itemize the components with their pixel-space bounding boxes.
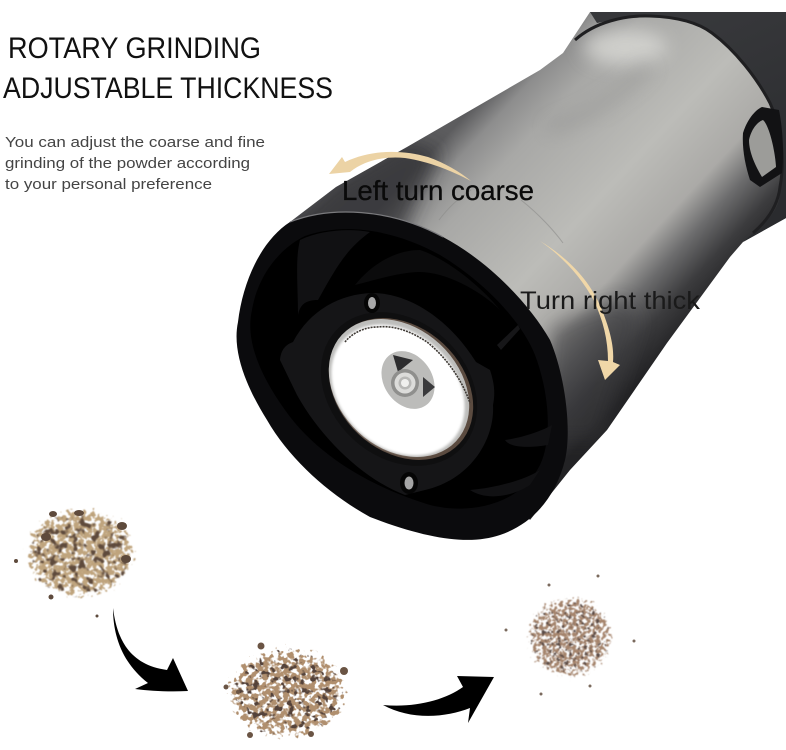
grinder front rim	[237, 212, 568, 540]
seam lines	[439, 190, 563, 243]
side button	[743, 107, 783, 187]
pepper grinder	[237, 0, 786, 540]
screws	[364, 293, 418, 494]
chamber blades	[297, 230, 552, 496]
rear collar	[590, 12, 786, 242]
ceramic burr white disc	[328, 318, 474, 460]
arrow: left turn	[329, 152, 471, 181]
label: turn right thick: Turn right thick	[520, 287, 701, 315]
description text: You can adjust the coarse and fine	[5, 134, 265, 151]
centre bolt	[382, 351, 435, 409]
title: ADJUSTABLE THICKNESS	[3, 72, 333, 105]
arrow: coarse to medium	[113, 608, 188, 691]
description text: grinding of the powder according	[5, 155, 250, 172]
title: ROTARY GRINDING	[8, 32, 261, 65]
description text: to your personal preference	[5, 176, 212, 193]
arrow: right turn	[540, 241, 620, 380]
pepper pile: medium	[221, 641, 353, 745]
title	[3, 32, 333, 105]
label: left turn coarse: Left turn coarse	[342, 175, 534, 206]
pepper pile: coarse	[14, 503, 140, 618]
burr holder ring	[280, 293, 494, 495]
arrow: medium to fine	[383, 676, 494, 723]
grinder body and collar	[270, 0, 786, 540]
pepper pile: fine	[504, 574, 636, 696]
description text	[5, 134, 265, 193]
grinder inner chamber	[250, 229, 548, 509]
